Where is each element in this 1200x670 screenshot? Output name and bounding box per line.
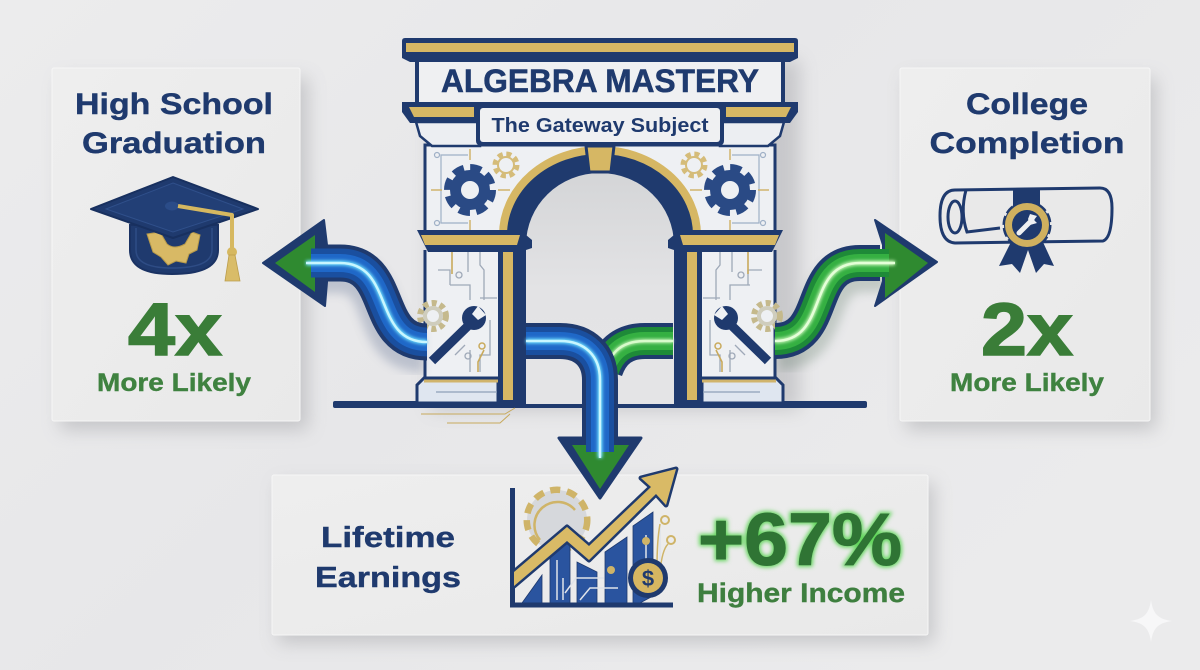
icon: diploma scroll [940, 188, 1112, 273]
icon: graduation cap [91, 177, 258, 281]
pier bases [417, 378, 498, 403]
heading: college completion: Completion [930, 127, 1124, 160]
capitals [417, 230, 532, 252]
piers [426, 250, 498, 377]
label: more likely: More Likely [950, 369, 1104, 397]
lower cornice [402, 102, 798, 123]
icon: growth chart: $ [642, 566, 654, 591]
heading: college completion: College [966, 88, 1088, 121]
title: ALGEBRA MASTERY [441, 63, 759, 99]
panel: college completion [900, 68, 1156, 430]
heading: lifetime earnings [315, 522, 461, 594]
label: higher income: Higher Income [697, 578, 905, 608]
stat: 2x: 2x [981, 288, 1073, 371]
stat: 4x: 4x [128, 288, 222, 371]
heading: high school graduation: Graduation [82, 127, 266, 160]
keystone [586, 146, 614, 172]
panel: lifetime earnings [272, 469, 934, 643]
heading: lifetime earnings: Lifetime [321, 522, 455, 554]
wrenches [432, 306, 768, 361]
stat: +67%: +67% [698, 498, 902, 581]
stat: +67%: +67% [698, 498, 902, 581]
frieze [415, 58, 785, 104]
heading: lifetime earnings: Earnings [315, 562, 461, 594]
heading: high school graduation [75, 88, 273, 160]
top cornice [402, 38, 798, 62]
entablature sides [416, 122, 480, 146]
base line [333, 401, 867, 408]
subtitle: The Gateway Subject [492, 115, 709, 137]
arrow: blue to lifetime earnings [526, 341, 641, 498]
heading: college completion [930, 88, 1124, 160]
heading: high school graduation: High School [75, 88, 273, 121]
icon: growth chart [512, 469, 676, 605]
label: more likely: More Likely [97, 369, 251, 397]
arch opening [498, 148, 702, 404]
panel: high school graduation [52, 68, 308, 430]
arrow: green to college completion [605, 220, 937, 370]
small pier gears [420, 303, 780, 329]
icon: sparkle watermark [1130, 600, 1172, 642]
gears [448, 154, 752, 212]
arrow: blue to high school graduation [263, 220, 427, 351]
upper panel [425, 145, 775, 235]
arch: algebra mastery gateway [333, 38, 867, 423]
